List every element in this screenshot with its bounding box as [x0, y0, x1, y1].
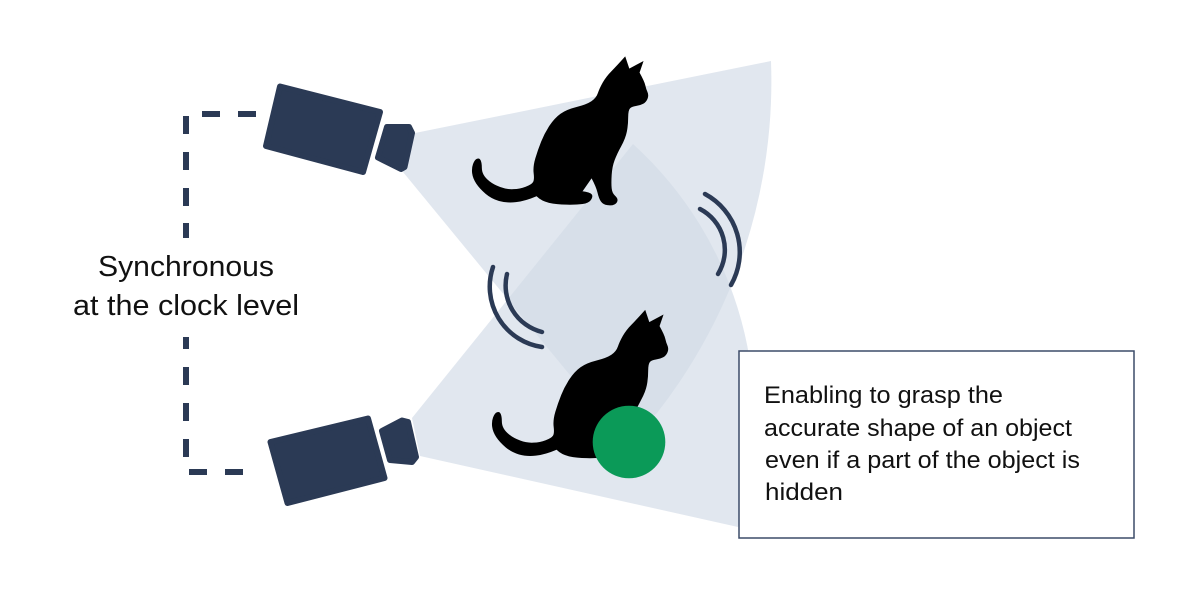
diagram: synchronous cameras viewing a cat: [74, 56, 1135, 539]
icon: green ball hiding the cat: [593, 406, 665, 478]
label: synchronous at the clock level: [73, 251, 299, 322]
signal arcs: left: [490, 267, 542, 347]
label: synchronous at the clock level: Synchronous: [98, 251, 274, 283]
callout box: accurate shape of an object: [764, 415, 1072, 442]
icon: upper camera: [266, 86, 412, 172]
view cone: upper camera: [403, 61, 771, 442]
signal arcs: right: [700, 194, 740, 285]
overlap of both view cones: [510, 144, 730, 416]
callout box: [739, 351, 1134, 538]
label: synchronous at the clock level: at the clock level: [73, 290, 299, 322]
callout box: Enabling to grasp the: [764, 382, 1003, 409]
icon: lower camera: [270, 418, 416, 503]
icon: cat in full view: [472, 57, 648, 205]
dashed sync line between cameras: [183, 111, 256, 475]
callout box: even if a part of the object is: [765, 447, 1080, 474]
view cone: lower camera: [412, 144, 754, 527]
icon: cat partly hidden: [492, 311, 668, 458]
callout box: hidden: [765, 479, 843, 506]
